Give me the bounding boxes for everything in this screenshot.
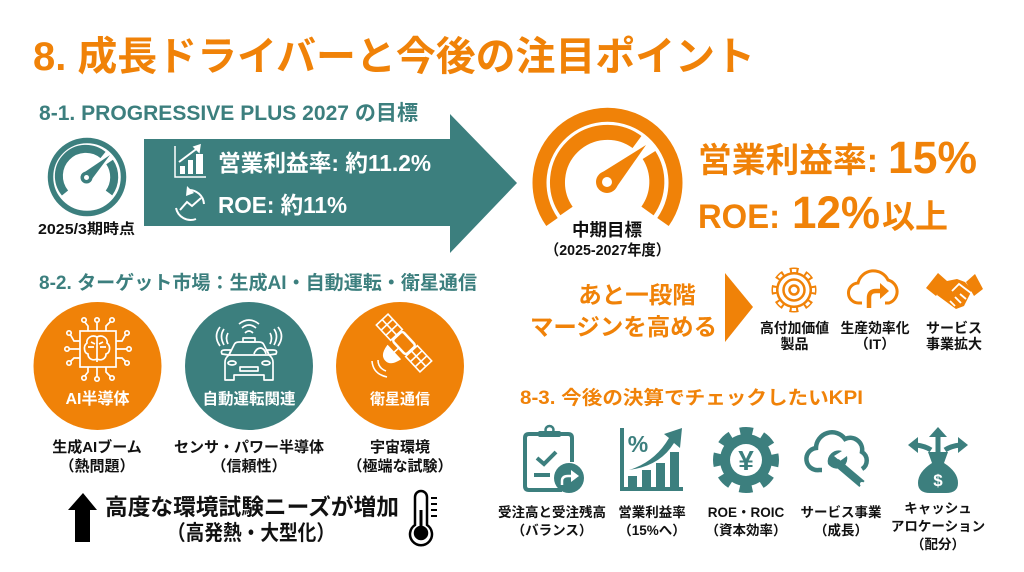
heading: 8-2: 8-2. ターゲット市場：生成AI・自動運転・衛星通信 xyxy=(39,271,477,294)
icon: current gauge xyxy=(50,140,124,214)
label: orders xyxy=(498,504,606,538)
label: cash allocation: アロケーション xyxy=(891,519,985,534)
heading: 8-1: 8-1. PROGRESSIVE PLUS 2027 の目標 xyxy=(39,102,418,125)
label: service expansion: サービス xyxy=(926,320,982,336)
market: satellite communication xyxy=(336,302,464,430)
label: autonomous driving: 自動運転関連 xyxy=(202,390,296,408)
label: service business: サービス事業 xyxy=(800,504,882,520)
note: space environment xyxy=(347,438,453,475)
callout: raise margin: あと一段階 xyxy=(578,282,696,308)
label: target years: （2025-2027年度） xyxy=(545,241,670,259)
note: sensors and power: センサ・パワー半導体 xyxy=(174,438,324,456)
label: current period: 2025/3期時点 xyxy=(38,220,136,238)
text: rising test needs: 高度な環境試験ニーズが増加 xyxy=(105,494,399,520)
icon: thermometer xyxy=(410,491,437,545)
arrow: up xyxy=(68,493,97,542)
label: operating margin: 営業利益率 xyxy=(618,504,686,520)
note: AI boom: 生成AIブーム xyxy=(52,438,142,456)
text: target ROE: 以上 xyxy=(882,198,948,235)
label: productivity IT: （IT） xyxy=(855,336,895,352)
icon: margin chart xyxy=(620,428,683,491)
icon: rising chart xyxy=(175,145,206,177)
text: target ROE: ROE: xyxy=(698,198,780,236)
icon: ROE cycle xyxy=(176,186,204,220)
note: space environment: 宇宙環境 xyxy=(370,438,430,456)
label: orders: （バランス） xyxy=(512,523,592,538)
text: current ROE: ROE: 約11% xyxy=(218,192,347,218)
label: service expansion xyxy=(926,320,982,352)
icon: target gauge xyxy=(540,115,676,222)
panel: 8-1 targets xyxy=(38,102,977,259)
note: sensors and power: （信頼性） xyxy=(211,457,287,475)
label: high value products: 高付加価値 xyxy=(760,320,829,336)
icon: handshake xyxy=(926,273,983,309)
label: AI semiconductor: AI半導体 xyxy=(65,389,130,408)
note: sensors and power xyxy=(174,438,324,475)
callout: raise margin xyxy=(530,282,717,340)
label: ROE ROIC: （資本効率） xyxy=(706,522,786,538)
text: current operating margin: 営業利益率: 約11.2% xyxy=(218,150,431,176)
label: high value products xyxy=(760,320,829,352)
label: cash allocation: （配分） xyxy=(911,537,965,552)
text: target operating margin: 営業利益率: xyxy=(698,142,878,180)
label: operating margin: （15%へ） xyxy=(618,523,686,538)
text: target ROE xyxy=(698,187,948,238)
label: orders: 受注高と受注残高 xyxy=(498,504,606,520)
arrow: triangle xyxy=(725,273,753,342)
icon: AI chip brain xyxy=(65,318,131,381)
panel: 8-2 target markets xyxy=(34,271,477,545)
note: space environment: （極端な試験） xyxy=(347,457,453,475)
label: productivity IT xyxy=(840,320,910,352)
icon: cloud arrow xyxy=(848,271,897,308)
icon: yen gear xyxy=(717,431,775,489)
panel: margin drivers xyxy=(530,270,983,352)
text: target ROE: 12% xyxy=(792,187,880,238)
arrow: progress xyxy=(144,114,517,253)
icon: gear outline xyxy=(774,270,814,310)
heading: 8-3: 8-3. 今後の決算でチェックしたいKPI xyxy=(520,386,863,409)
title: 8. 成長ドライバーと今後の注目ポイント xyxy=(33,35,755,79)
label: productivity IT: 生産効率化 xyxy=(840,320,910,336)
market: autonomous driving xyxy=(185,302,313,430)
text: target operating margin: 15% xyxy=(888,132,977,183)
label: cash allocation xyxy=(891,501,985,552)
icon: satellite xyxy=(364,314,432,383)
panel: 8-3 KPIs xyxy=(498,386,985,552)
icon: money bag xyxy=(908,427,968,493)
icon: clipboard xyxy=(525,426,584,493)
icon: money bag: $ xyxy=(933,471,943,490)
label: ROE ROIC xyxy=(706,505,786,538)
market: AI semiconductor xyxy=(34,302,162,430)
label: satellite communication: 衛星通信 xyxy=(370,390,430,408)
callout: raise margin: マージンを高める xyxy=(530,314,717,340)
icon: cloud wrench xyxy=(806,432,867,486)
label: mid-term target: 中期目標 xyxy=(572,220,642,240)
icon: yen gear: ¥ xyxy=(738,445,754,476)
text: heat and scale: （高発熱・大型化） xyxy=(167,522,335,545)
label: service expansion: 事業拡大 xyxy=(926,336,982,352)
note: AI boom xyxy=(52,438,142,475)
label: cash allocation: キャッシュ xyxy=(904,501,972,516)
label: ROE ROIC: ROE・ROIC xyxy=(708,505,784,520)
label: service business xyxy=(800,504,882,538)
note: AI boom: （熱問題） xyxy=(59,457,135,475)
label: high value products: 製品 xyxy=(780,336,808,352)
text: target operating margin xyxy=(698,132,977,183)
icon: margin chart: % xyxy=(628,431,648,457)
label: operating margin xyxy=(618,504,686,538)
icon: sensor car xyxy=(216,320,282,380)
label: service business: （成長） xyxy=(814,522,868,538)
